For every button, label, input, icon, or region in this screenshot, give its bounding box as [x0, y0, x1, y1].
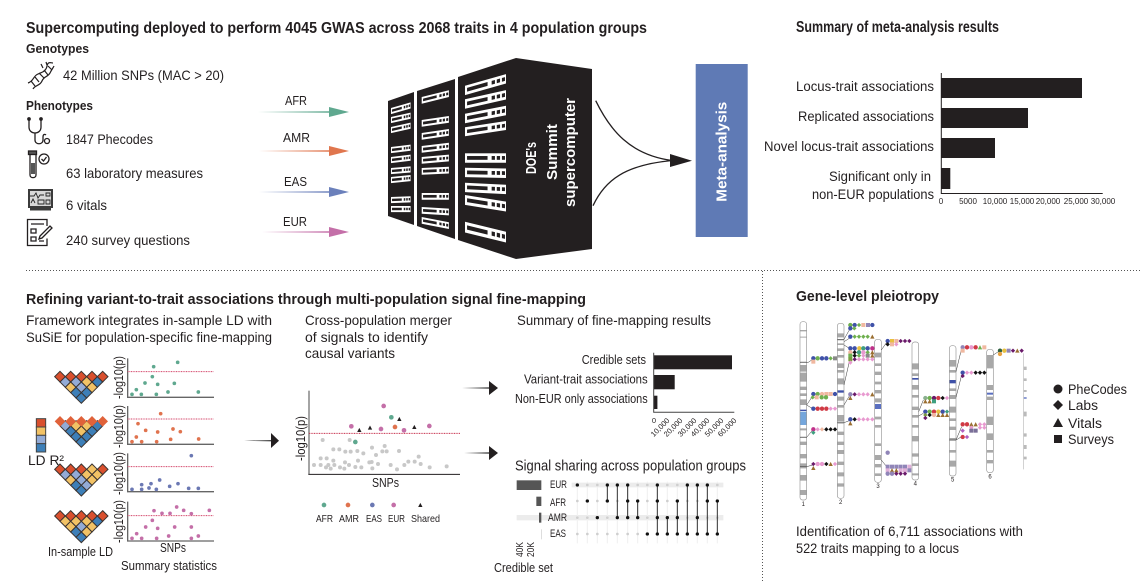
bar chart: fine-mapping — [515, 353, 738, 439]
markers: chromosome 5 loci — [960, 345, 986, 439]
chromosome ideogram — [800, 322, 1027, 508]
upset labels: EUR — [550, 479, 567, 491]
LD triangle 1 — [55, 371, 108, 403]
chromosome labels: 5 — [951, 478, 955, 484]
label: credible set: Credible set — [494, 561, 553, 575]
upset plot — [517, 480, 723, 543]
bar chart: meta-analysis: Replicated associations — [798, 109, 934, 124]
chromosome 5 — [949, 346, 956, 476]
label: in-sample LD: In-sample LD — [48, 544, 113, 559]
chromosome labels: 2 — [839, 500, 843, 506]
server rack 3 with label — [458, 58, 592, 259]
chromosome labels: 4 — [914, 482, 918, 488]
heading: phenotypes: Phenotypes — [26, 98, 93, 113]
arrow: AMR: AMR — [283, 130, 310, 145]
heading: signal sharing: Signal sharing across population groups — [515, 458, 746, 475]
heading: genotypes: Genotypes — [26, 41, 89, 56]
chromosome 4 — [912, 342, 919, 480]
title: supercomputing: Supercomputing deployed to perform 4045 GWAS across 2068 traits in 4 population groups — [26, 20, 647, 37]
bar chart: fine-mapping: 50,000 — [703, 416, 725, 439]
heading: gene-level pleiotropy: Gene-level pleiotropy — [796, 288, 940, 305]
scatter AFR — [128, 358, 214, 397]
legend: populations: EUR — [388, 513, 405, 525]
bar chart: fine-mapping: 30,000 — [676, 416, 698, 439]
bar chart: fine-mapping: 60,000 — [716, 416, 738, 439]
text: cross-population merger — [305, 312, 452, 361]
bar chart: fine-mapping: 0 — [652, 416, 656, 425]
text: cross-population merger: causal variants — [305, 345, 395, 361]
legend: populations: AFR — [316, 513, 333, 525]
upset labels: AMR — [548, 512, 567, 524]
heading: summary of meta-analysis: Summary of meta-analysis results — [796, 19, 999, 36]
axis labels: -log10(p): -log10(p) — [111, 356, 126, 399]
label: SNPs: SNPs — [160, 540, 186, 555]
axis labels: -log10(p): -log10(p) — [111, 405, 126, 448]
axis labels: -log10(p): -log10(p) — [111, 452, 126, 495]
bar chart: meta-analysis: 15,000 — [1010, 197, 1035, 206]
icon: test tube — [28, 151, 49, 178]
arrow: AFR: AFR — [285, 93, 307, 108]
axis label: merged SNPs: SNPs — [372, 475, 399, 490]
scatter AMR — [128, 406, 214, 444]
markers: chromosome 4 loci — [923, 396, 949, 420]
text: vitals: 6 vitals — [66, 197, 107, 213]
upset axis ticks — [515, 542, 537, 557]
bar chart: meta-analysis: 25,000 — [1064, 197, 1089, 206]
axis labels: -log10(p): -log10(p) — [111, 500, 126, 543]
bar chart: fine-mapping: Variant-trait associations — [524, 372, 648, 386]
arrow: EAS: EAS — [284, 174, 307, 189]
LD triangle 2 — [55, 416, 108, 447]
arrow: EUR: EUR — [283, 214, 307, 229]
bar chart: fine-mapping: 20,000 — [662, 416, 684, 439]
bar chart: meta-analysis: 0 — [939, 197, 944, 206]
upset axis ticks: 20K — [526, 542, 537, 557]
server rack 3 with label: supercomputer — [562, 98, 579, 207]
upset axis ticks: 40K — [515, 542, 526, 557]
server rack 3 with label: Summit — [544, 124, 561, 180]
chromosome labels — [802, 474, 992, 508]
icon: dna — [28, 62, 54, 89]
text: framework — [26, 312, 272, 345]
LD heatmaps — [36, 358, 214, 543]
panel: meta-analysis — [696, 64, 748, 237]
text: laboratory measures: 63 laboratory measures — [66, 165, 203, 181]
text: identification — [796, 523, 1023, 556]
text: snps: 42 Million SNPs (MAC > 20) — [63, 67, 224, 83]
icon: survey — [28, 220, 52, 246]
label: summary statistics: Summary statistics — [121, 558, 217, 573]
legend: trait types — [1053, 382, 1127, 447]
LD triangle 4 — [55, 511, 108, 543]
text: identification: Identification of 6,711 associations with — [796, 523, 1023, 539]
LD colour scale — [36, 419, 46, 452]
locus leader lines — [800, 330, 998, 467]
bar chart: fine-mapping: 10,000 — [649, 416, 671, 439]
legend: populations: Shared — [411, 513, 440, 525]
markers: chromosome 2 loci — [848, 323, 874, 425]
text: cross-population merger: of signals to identify — [305, 329, 428, 345]
bar chart: meta-analysis: 5000 — [959, 197, 977, 206]
arrow: EUR — [262, 214, 349, 237]
chromosome labels: 1 — [802, 502, 806, 508]
chromosome 2 — [837, 323, 844, 498]
text: phecodes: 1847 Phecodes — [66, 131, 153, 147]
upset labels — [548, 479, 567, 540]
server rack 1 — [388, 92, 414, 225]
markers: chromosome 3 loci — [885, 339, 911, 476]
upset labels: AFR — [550, 497, 566, 509]
arrow: to merger — [244, 433, 279, 448]
text: summary of fine-mapping: Summary of fine-mapping results — [517, 312, 711, 328]
arrow: AMR — [259, 130, 349, 156]
arrow: EAS — [259, 174, 349, 197]
label: LD R2: LD R² — [28, 453, 65, 468]
legend: populations — [316, 513, 440, 525]
axis label: merged -log10(p): -log10(p) — [293, 416, 308, 461]
chromosome 6 — [987, 349, 993, 473]
chromosome 1 — [800, 322, 807, 500]
text: survey questions: 240 survey questions — [66, 232, 190, 248]
icon: stethoscope — [28, 118, 50, 144]
legend: trait types: Labs — [1068, 398, 1098, 413]
heading: refining: Refining variant-to-trait associations through multi-population signal fine-mapping — [26, 291, 586, 308]
chromosome labels: 6 — [988, 474, 992, 480]
arrow: to fine-mapping results — [462, 381, 498, 395]
text: framework: SuSiE for population-specific fine-mapping — [26, 329, 272, 345]
chromosome labels: 3 — [876, 484, 880, 490]
bar chart: meta-analysis: non-EUR populations — [812, 187, 934, 202]
axis labels: -log10(p) — [111, 356, 126, 543]
bar chart: meta-analysis: Significant only in — [829, 169, 931, 184]
legend: populations: AMR — [339, 513, 359, 525]
markers: chromosome 6 locus — [998, 348, 1024, 356]
text: identification: 522 traits mapping to a locus — [796, 540, 959, 556]
markers: chromosome 1 loci — [810, 356, 837, 470]
chromosome 3 — [875, 339, 881, 482]
legend: trait types: Vitals — [1068, 416, 1102, 431]
server rack 3 with label: DOE's — [523, 142, 540, 174]
bar chart: meta-analysis — [764, 73, 1116, 206]
merged scatter plot — [308, 391, 460, 507]
arrow: merging curves — [593, 101, 692, 206]
upset labels: EAS — [550, 528, 566, 540]
arrow: AFR — [258, 93, 349, 117]
bar chart: fine-mapping: 40,000 — [689, 416, 711, 439]
legend: populations: EAS — [366, 513, 382, 525]
server rack 2 — [417, 79, 455, 239]
bar chart: fine-mapping: Non-EUR only associations — [515, 392, 648, 406]
LD triangle 3 — [55, 464, 108, 496]
chromosome 7 partial — [1023, 353, 1027, 469]
bar chart: meta-analysis: Locus-trait associations — [796, 79, 934, 94]
panel: meta-analysis: Meta-analysis — [714, 102, 731, 202]
arrow: to signal sharing — [464, 446, 498, 460]
legend: trait types: PheCodes — [1068, 382, 1127, 397]
bar chart: meta-analysis: Novel locus-trait associations — [764, 139, 934, 154]
bar chart: meta-analysis: 30,000 — [1091, 197, 1116, 206]
scatter EAS — [128, 453, 214, 492]
icon: vitals monitor — [28, 189, 53, 210]
legend: trait types: Surveys — [1068, 432, 1114, 447]
scatter EUR — [128, 502, 214, 541]
text: framework: Framework integrates in-sample LD with — [26, 312, 272, 328]
bar chart: fine-mapping: Credible sets — [582, 353, 646, 367]
bar chart: meta-analysis: 10,000 — [983, 197, 1008, 206]
bar chart: meta-analysis: 20,000 — [1036, 197, 1061, 206]
text: cross-population merger: Cross-population merger — [305, 312, 452, 328]
